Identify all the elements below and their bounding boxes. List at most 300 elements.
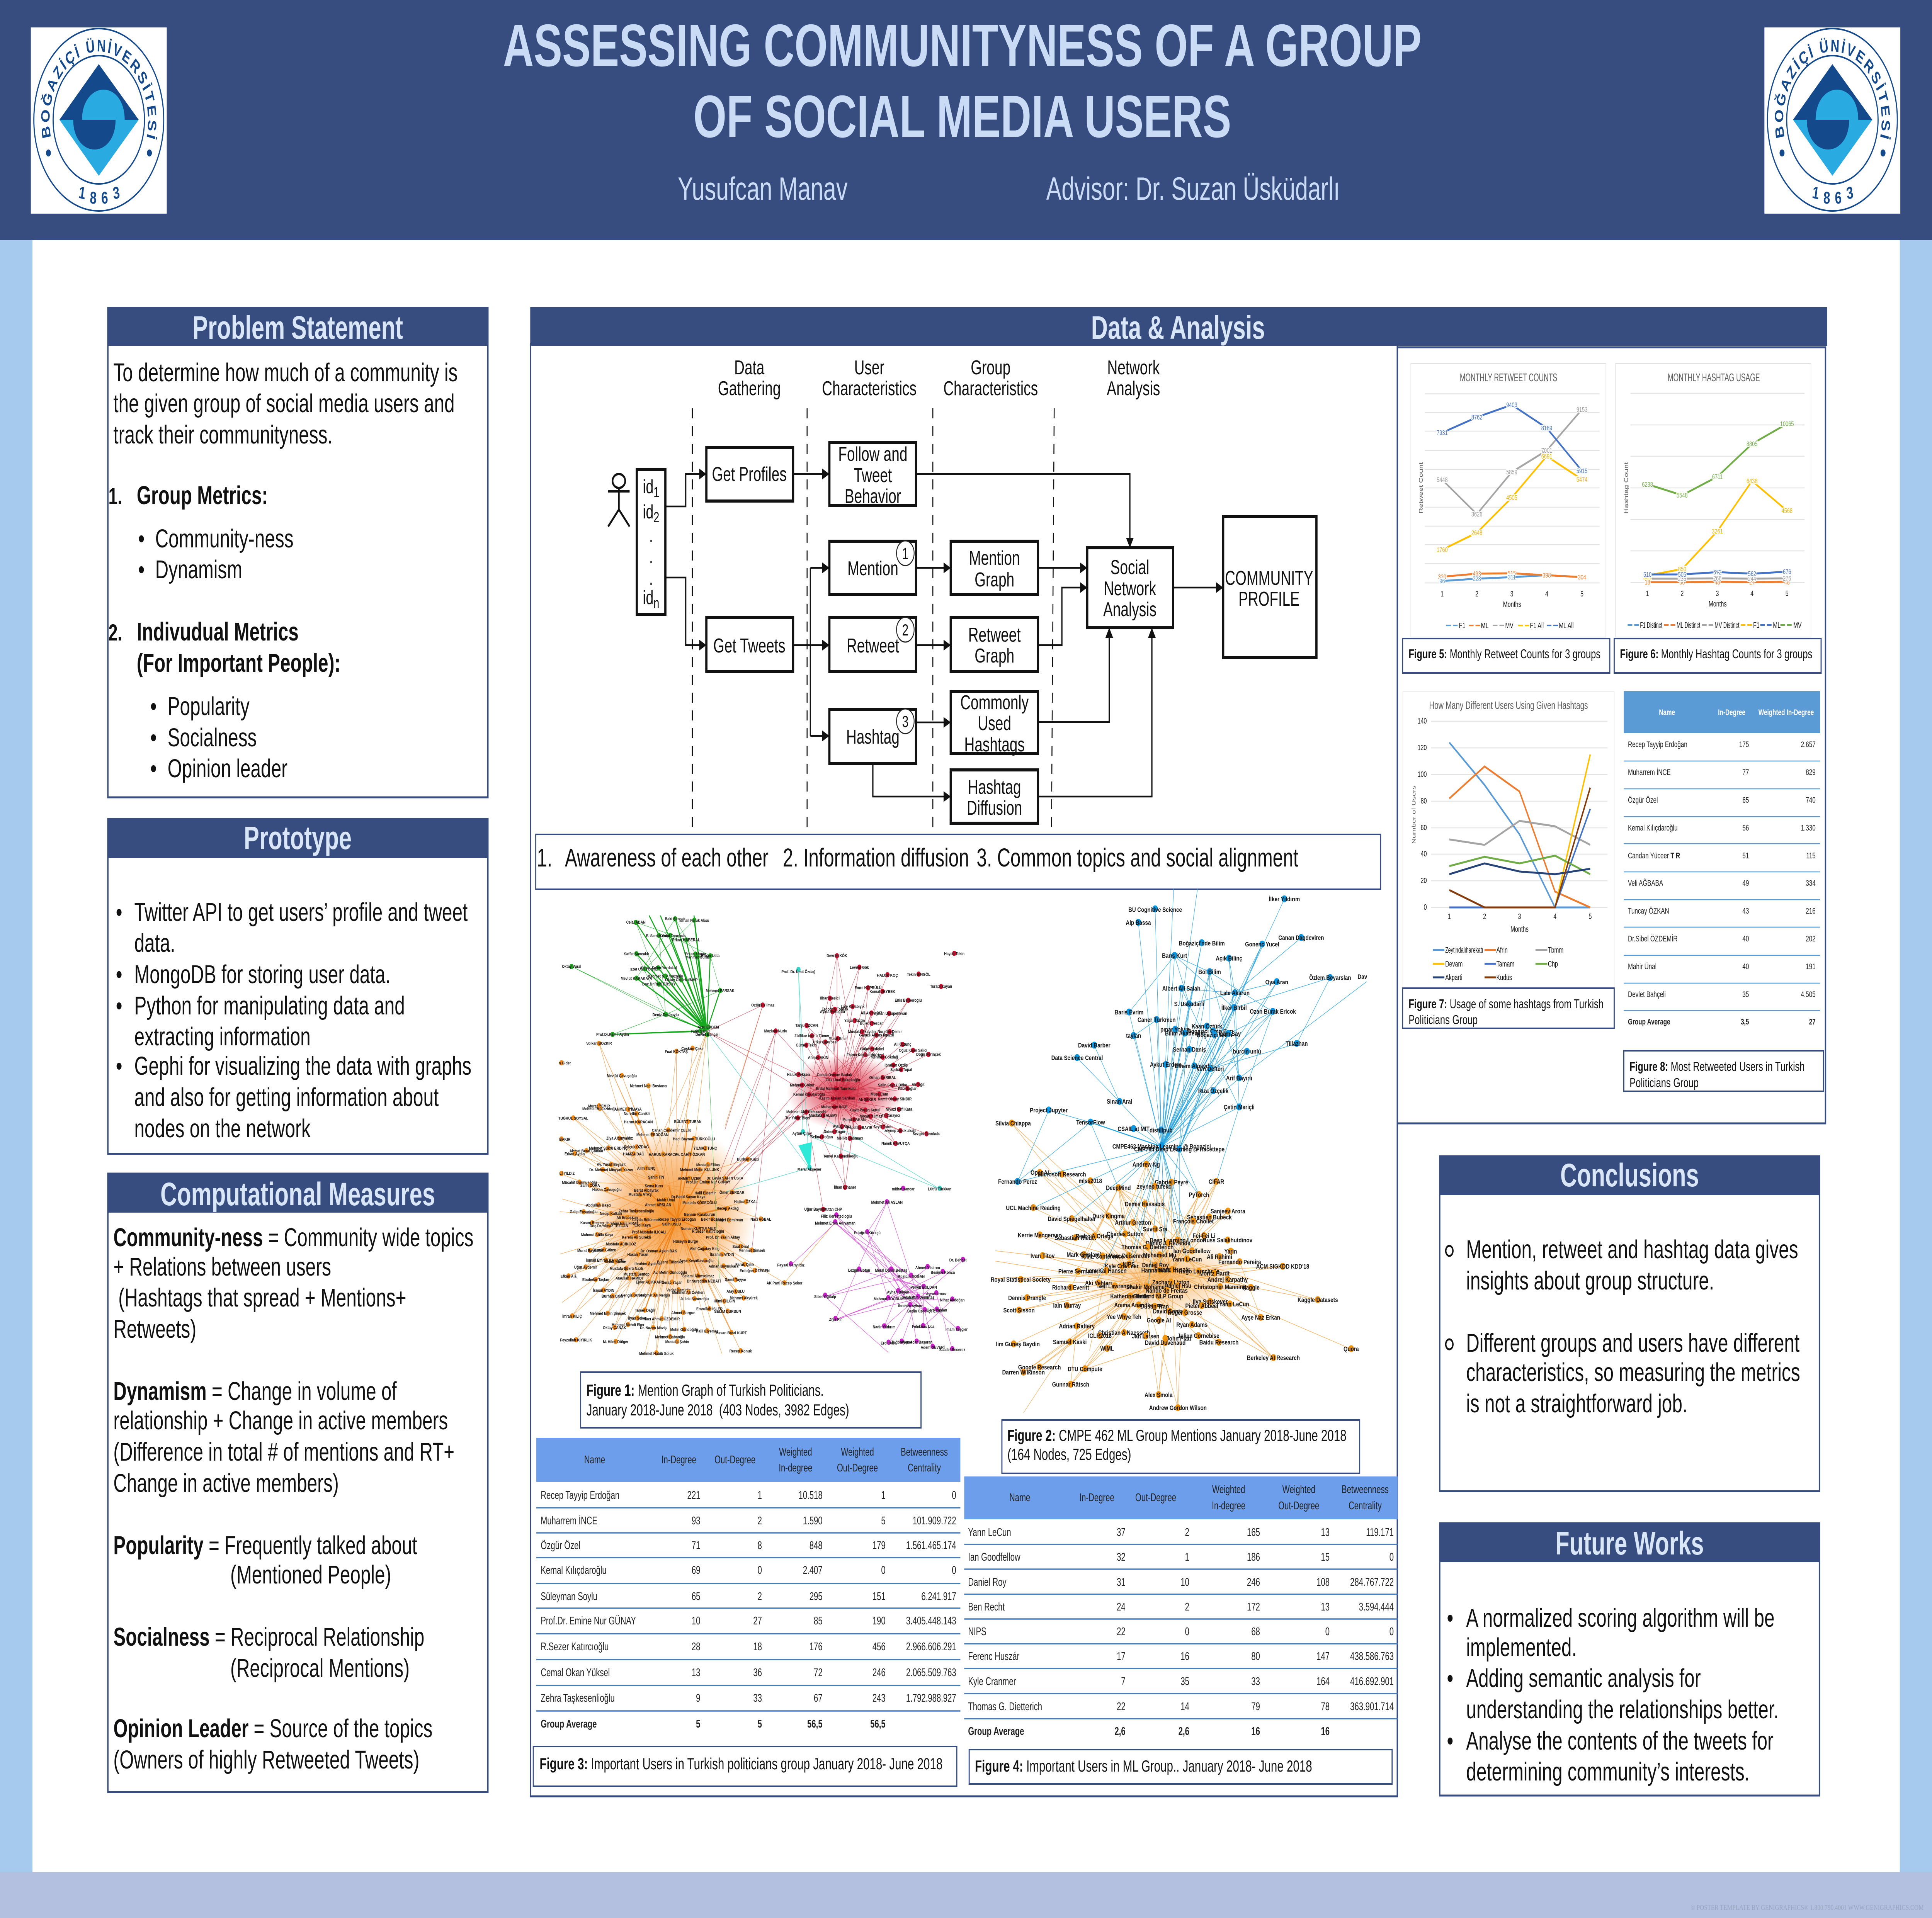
orange nodes: Kerem Ali Sürekli — [622, 1235, 651, 1240]
blue nodes: Rıza Özçelik — [1198, 1087, 1229, 1095]
red nodes: Filiz Sağlar — [898, 1087, 917, 1091]
table: figure 4: 119.171 — [1366, 1527, 1394, 1539]
caption: figure 3 — [533, 1746, 957, 1786]
magenta nodes: Dr. Behçet — [949, 1258, 967, 1263]
table: figure 4: 246 — [1247, 1577, 1260, 1588]
table: figure 8: 216 — [1806, 906, 1816, 916]
orange nodes: Stanford NLP Group — [1133, 1293, 1183, 1300]
green nodes: Ahmet Selim Yurdakul — [640, 966, 677, 970]
red nodes: Aykut Erdoğdu — [820, 1010, 845, 1014]
table: figure 3: 65 — [692, 1591, 700, 1603]
flow boxes: Commonly — [960, 691, 1029, 714]
table: figure 3: Betweenness — [901, 1446, 948, 1458]
orange nodes: Marc Deisenroth — [1109, 1252, 1149, 1260]
orange nodes: Ataullah HAMİDİ — [616, 1276, 643, 1281]
chart: monthly hashtag usage: 2 — [1680, 589, 1684, 598]
text block: conclusions: Mention, retweet and hashtag data gives — [1466, 1235, 1798, 1264]
orange nodes: Mehmet ERDOĞAN — [636, 1132, 668, 1137]
table: figure 4: 2 — [1185, 1527, 1189, 1539]
text block: problem: the given group of social media users and — [113, 389, 455, 418]
callout: community properties: 3. Common topics and social alignment — [976, 843, 1298, 872]
orange nodes: Mohamed Mu — [1143, 1252, 1176, 1259]
flow boxes: 3 — [902, 712, 908, 731]
flow diagram: Data — [734, 356, 765, 379]
table: figure 4: 31 — [1117, 1577, 1126, 1588]
red nodes: Mazlum Nurlu — [764, 1029, 787, 1034]
id list: 1 — [653, 484, 659, 500]
heading: problem statement: Problem Statement — [192, 310, 403, 346]
chart: monthly retweet counts: F1 — [1459, 621, 1465, 630]
panel: prototype — [107, 818, 488, 1154]
footer band: © POSTER TEMPLATE BY GENIGRAPHICS® 1.800.790.4001 WWW.GENIGRAPHICS.COM — [1690, 1903, 1924, 1912]
orange nodes: Zehra Taşkesenlioğlu — [619, 1209, 654, 1214]
orange nodes: Recep Akdağ — [717, 1206, 739, 1211]
chart: monthly retweet counts: 5 — [1580, 590, 1583, 598]
orange nodes: Alim TUNÇ — [637, 1166, 656, 1171]
id list: . — [649, 525, 653, 547]
chart: monthly retweet counts: 493 — [1473, 570, 1481, 578]
chart: monthly hashtag usage: 5 — [1786, 589, 1789, 598]
red nodes: HALUK KOÇ — [877, 973, 898, 978]
orange nodes: Mehmet Ali Cevheri — [672, 1290, 705, 1295]
orange nodes: Halil Etyemez — [696, 1329, 718, 1334]
orange nodes: Ivan Titov — [1031, 1252, 1055, 1260]
orange nodes: Mustafa Elitaş — [696, 1163, 720, 1167]
orange nodes: Ayşe Naz Erkan — [1242, 1314, 1280, 1322]
table: figure 3: Kemal Kılıçdaroğlu — [541, 1565, 607, 1577]
orange nodes: Hatice ÖZKAL — [734, 1199, 758, 1204]
text block: problem: • — [138, 555, 145, 584]
blue nodes: Tillazhan — [1286, 1040, 1308, 1048]
caption: figure 8: Figure 8: Most Retweeted Users in Turkish — [1629, 1060, 1805, 1074]
orange nodes: Erdoğan ÖZEGEN — [740, 1268, 770, 1273]
chart: monthly hashtag usage: 266 — [1713, 575, 1721, 583]
text block: problem: • — [150, 754, 157, 783]
chart: monthly hashtag usage: 6438 — [1747, 477, 1758, 485]
blue nodes: Bol Bilim — [1198, 968, 1221, 976]
red nodes: Haluk Pekşen — [787, 1072, 810, 1077]
chart: hashtag users: Akparti — [1445, 973, 1463, 982]
text block: problem: Dynamism — [155, 555, 242, 584]
orange nodes: R.Sezer Katırcıoğlu — [692, 1229, 724, 1234]
table: figure 3: 27 — [753, 1615, 762, 1627]
table: figure 8: 4.505 — [1801, 989, 1816, 999]
table: figure 4: Ferenc Huszár — [968, 1651, 1019, 1663]
orange nodes: Erkan Aydın — [565, 1152, 585, 1157]
blue nodes: Canan Dagdeviren — [1278, 934, 1324, 941]
orange nodes: Moritz Hardt — [1199, 1270, 1230, 1277]
orange nodes: Harun KARACAN — [624, 1120, 653, 1125]
table: figure 4: 80 — [1251, 1651, 1260, 1663]
table: figure 3: 2 — [758, 1591, 762, 1603]
blue nodes: Ozan Burak Ericok — [1250, 1008, 1296, 1016]
orange nodes: Pierre Sermanet — [1058, 1268, 1098, 1275]
text block: future works — [1447, 1604, 1779, 1786]
orange nodes: Microsoft Research — [1038, 1171, 1086, 1178]
id list: 2 — [653, 509, 659, 525]
orange nodes: Yarin — [1225, 1248, 1237, 1255]
orange nodes: Ian Goodfellow — [1173, 1248, 1211, 1255]
orange nodes: lim Güneş Baydin — [996, 1341, 1040, 1348]
magenta nodes: Faysal Sarıyıldız — [777, 1263, 804, 1268]
blue nodes: burcin unlu — [1233, 1048, 1261, 1055]
red nodes: Didem Engin — [824, 1130, 845, 1134]
orange nodes: Galip Ensarioğlu — [570, 1210, 598, 1215]
text block: problem: Socialness — [168, 723, 257, 752]
chart: hashtag users: 140 — [1418, 717, 1427, 725]
chart: monthly retweet counts: MONTHLY RETWEET COUNTS — [1460, 372, 1557, 384]
chart: hashtag users: 4 — [1553, 912, 1557, 921]
table: figure 3: 85 — [814, 1615, 823, 1627]
table: figure 3: 5 — [758, 1718, 762, 1730]
table: figure 3: 6.241.917 — [921, 1591, 956, 1603]
orange nodes: Pieter Abbeel — [1185, 1303, 1218, 1310]
chart: monthly retweet counts: 3 — [1510, 590, 1514, 598]
blue nodes: Ethem Alpaydın — [1175, 1063, 1214, 1070]
orange nodes: Google AI — [1147, 1317, 1171, 1324]
magenta nodes: Ayşe Acar Başaran — [901, 1340, 932, 1345]
table: figure 8: 202 — [1806, 934, 1816, 943]
orange nodes: Lars Kai Hansen — [1086, 1267, 1127, 1274]
table: figure 8: Muharrem İNCE — [1628, 767, 1671, 777]
chart: hashtag users: 120 — [1418, 743, 1427, 752]
orange nodes: HARUN KARACA — [649, 1152, 678, 1157]
table: figure 3: Weighted — [841, 1446, 874, 1458]
table: figure 3: 33 — [753, 1692, 762, 1704]
orange nodes: Faruk Çelik — [735, 1262, 754, 1267]
orange nodes: AK Parti Recep Şeker — [767, 1281, 802, 1286]
table: figure 8: 2.657 — [1801, 739, 1816, 749]
table: figure 3: 848 — [810, 1540, 823, 1552]
blue nodes: Veri Defteri — [1197, 1065, 1224, 1073]
table: figure 3: 246 — [872, 1667, 886, 1679]
table: figure 3: Prof.Dr. Emine Nur GÜNAY — [541, 1615, 636, 1627]
chart: monthly hashtag usage: 4568 — [1781, 507, 1793, 515]
chart: monthly retweet counts: 1760 — [1437, 546, 1448, 554]
table: figure 8: Özgür Özel — [1628, 795, 1658, 805]
table: figure 4: Name — [1009, 1492, 1030, 1504]
blue nodes — [998, 895, 1367, 1186]
table: figure 4: 363.901.714 — [1350, 1701, 1394, 1713]
text block: prototype tools: MongoDB for storing user data. — [134, 960, 390, 989]
green nodes: Mehmet PARSAK — [706, 989, 735, 993]
text block: problem: • — [150, 692, 157, 721]
caption: figure 7: Figure 7: Usage of some hashtags from Turkish — [1408, 997, 1604, 1011]
id list: id — [643, 476, 653, 498]
blue nodes: Özlem Beyarslan — [1309, 974, 1351, 982]
table: figure 8: Candan Yüceer T R — [1628, 851, 1680, 860]
red nodes: Temel Karamollaoğlu — [823, 1154, 859, 1159]
orange nodes: John Platt — [1166, 1335, 1191, 1342]
orange nodes: Mehmet Mehdi Eker — [612, 1323, 645, 1328]
green nodes: Celal ADAN — [626, 920, 646, 925]
red nodes: Devrim KÖK — [827, 953, 847, 958]
orange nodes: David Duvenaud — [1145, 1339, 1185, 1347]
chart: monthly hashtag usage: 4 — [1750, 589, 1753, 598]
flow diagram: User — [854, 356, 884, 379]
orange nodes: Selçuk ÖZDAĞ — [624, 1144, 649, 1150]
table: figure 4: 16 — [1321, 1726, 1330, 1738]
flow boxes: 2 — [902, 621, 908, 639]
orange nodes: Ferenc Huszár — [1155, 1266, 1190, 1274]
footer band — [0, 1872, 1932, 1918]
table: figure 3: In-Degree — [662, 1454, 696, 1466]
table: figure 3: Recep Tayyip Erdoğan — [541, 1490, 619, 1502]
table: figure 4: 186 — [1247, 1551, 1260, 1563]
orange nodes: Jülide Sarıeroğlu — [680, 1297, 709, 1302]
red nodes: Aytuğ Atıcı — [833, 1125, 851, 1129]
orange nodes: Roger Grosse — [1168, 1309, 1202, 1317]
blue nodes: Data Science Central — [1051, 1055, 1103, 1062]
red nodes: Sezgin Tanrıkulu — [913, 1132, 940, 1137]
red nodes: Erdoğan Toprak — [821, 1007, 849, 1012]
table: figure 4: 165 — [1247, 1527, 1260, 1539]
text block: prototype tools — [116, 898, 471, 1143]
table: figure 4: Kyle Cranmer — [968, 1676, 1016, 1688]
red nodes: Orhan SARIBAL — [869, 1075, 896, 1080]
table: figure 3: 0 — [952, 1490, 956, 1502]
table: figure 4: Weighted — [1282, 1484, 1315, 1496]
orange nodes: Bülent Tüfenkci — [657, 1260, 683, 1265]
logo right: 1 — [1811, 183, 1820, 203]
magenta nodes: Mahmut TOĞRUL — [874, 1296, 903, 1302]
chart: monthly retweet counts: 2 — [1475, 590, 1478, 598]
text block: future works: A normalized scoring algorithm will be — [1466, 1604, 1774, 1633]
orange nodes: Hanna Wallach — [1141, 1267, 1178, 1274]
red nodes: zeynep altıok akatlı — [884, 1129, 917, 1133]
orange nodes: Aki Vehtari — [1085, 1280, 1112, 1287]
table: figure 4: 68 — [1251, 1626, 1260, 1638]
table: figure 8: 49 — [1742, 878, 1749, 888]
flow boxes: Mention — [969, 547, 1020, 569]
caption: figure 1 — [581, 1372, 921, 1428]
orange nodes: Mustafa Şahin — [665, 1340, 689, 1344]
orange nodes: Andrej Karpathy — [1208, 1276, 1248, 1283]
orange nodes: Mustafa Şentop — [623, 1272, 650, 1277]
magenta nodes: Ziya Pir — [829, 1317, 842, 1322]
text block: conclusions: is not a straightforward job. — [1466, 1389, 1687, 1418]
table: figure 3: Out-Degree — [837, 1462, 878, 1474]
orange nodes: Gabriel Peyré — [1155, 1179, 1188, 1186]
text block: measures: Socialness = Reciprocal Relationship — [113, 1622, 424, 1651]
table: figure 3: 295 — [810, 1591, 823, 1603]
orange nodes: Daniel Hsu — [1165, 1283, 1191, 1289]
orange nodes: Bekir Bozdağ — [701, 1217, 723, 1222]
orange nodes: Hasan Turan — [628, 1252, 648, 1257]
orange nodes — [991, 1120, 1359, 1412]
title: ASSESSING COMMUNITYNESS OF A GROUP — [503, 12, 1422, 79]
orange nodes: İsmail AYDIN — [593, 1288, 614, 1293]
orange nodes: Burhan Çakır — [602, 1294, 624, 1299]
blue nodes: Caner Türkmen — [1138, 1016, 1175, 1024]
table: figure 3: 1.561.465.174 — [906, 1540, 956, 1552]
blue nodes: Arif Bayırlı — [1226, 1075, 1252, 1082]
red nodes — [751, 951, 964, 1212]
table: figure 8: Dr.Sibel ÖZDEMİR — [1628, 934, 1677, 943]
table: figure 3: 9 — [696, 1692, 700, 1704]
orange nodes: M. Hilmi Dülger — [603, 1340, 628, 1344]
table: figure 8: 175 — [1739, 739, 1749, 749]
red nodes: Kemal ZEYBEK — [869, 990, 896, 994]
orange nodes: Feyzullah KIYIKLIK — [560, 1338, 592, 1343]
table: figure 8 — [1624, 691, 1820, 1026]
right side strip — [1900, 240, 1932, 1872]
chart: monthly retweet counts: 5448 — [1437, 476, 1448, 484]
text block: prototype tools: • — [116, 898, 122, 927]
table: figure 3: 2 — [758, 1515, 762, 1527]
orange nodes: Vedat Demiröz — [667, 1288, 690, 1293]
orange nodes: Tamer Dağlı — [635, 1308, 655, 1313]
flow boxes: 1 — [902, 544, 908, 562]
table: figure 4: Daniel Roy — [968, 1577, 1007, 1588]
table: figure 3: 10.518 — [799, 1490, 823, 1502]
chart: hashtag users: 3 — [1518, 912, 1521, 921]
text block: measures: + Relations between users — [113, 1252, 331, 1281]
chart: monthly retweet counts: 5859 — [1506, 469, 1517, 476]
logo right: 6 — [1835, 188, 1842, 208]
blue nodes: CSAIL at MIT — [1117, 1126, 1150, 1133]
chart: monthly hashtag usage — [1616, 364, 1811, 637]
caption: figure 8 — [1624, 1051, 1823, 1091]
chart: hashtag users — [1403, 692, 1614, 988]
table: figure 3: 18 — [753, 1641, 762, 1653]
orange nodes: Bennur Karaburun — [684, 1213, 715, 1217]
orange nodes: Selami Altınsolmaz — [682, 1274, 714, 1279]
chart: monthly retweet counts: 96 — [1439, 578, 1445, 585]
table: figure 3: 93 — [692, 1515, 700, 1527]
orange nodes: Kaggle — [1242, 1284, 1260, 1291]
orange nodes: Serap Yaşar — [662, 1281, 682, 1285]
orange nodes: DeepMind — [1106, 1184, 1131, 1192]
logo left: 8 — [90, 188, 97, 208]
orange nodes: Mehmet Metin KULUNK — [680, 1168, 719, 1172]
text block: conclusions — [1446, 1235, 1800, 1418]
blue nodes: S. Uskudarli — [1174, 1001, 1204, 1008]
table: figure 4: Out-Degree — [1135, 1492, 1176, 1504]
orange nodes: Ömer SERDAR — [719, 1189, 745, 1195]
orange nodes: Ali Ercoşkun — [616, 1216, 638, 1220]
orange nodes: Dr. Mehmet Muş — [589, 1168, 616, 1173]
table: figure 8: Name — [1659, 707, 1675, 717]
chart: hashtag users: 100 — [1418, 770, 1427, 779]
orange nodes: Av. Yusuf Beyazıt — [597, 1162, 626, 1167]
table: figure 4: 0 — [1389, 1626, 1394, 1638]
caption: figure 7 — [1403, 988, 1614, 1028]
chart: monthly retweet counts: 8762 — [1471, 414, 1482, 421]
green nodes: E. Semih Yalçın — [646, 934, 672, 938]
red nodes: Mehmet Gökdağ — [871, 1055, 898, 1060]
table: figure 3: Zehra Taşkesenlioğlu — [541, 1692, 615, 1704]
orange nodes: TUĞRUL SOYSAL — [558, 1115, 588, 1121]
table: figure 8: Group Average — [1628, 1017, 1670, 1026]
red nodes: Lale Karabıyık — [841, 1004, 865, 1009]
table: figure 8: Mahir Ünal — [1628, 962, 1656, 971]
id list: id — [643, 501, 653, 523]
text block: problem: Popularity — [168, 692, 250, 721]
chart: monthly hashtag usage: F1 Distinct — [1640, 621, 1662, 630]
red nodes: Cavit Puran Sertel — [850, 1108, 881, 1113]
chart: monthly retweet counts: 320 — [1438, 573, 1446, 581]
id list: . — [649, 568, 653, 590]
blue nodes: Oya Aran — [1265, 979, 1288, 986]
red nodes: Emre KÖPRÜLÜ — [855, 985, 882, 990]
orange nodes: Erol Kaya — [634, 1223, 651, 1228]
red nodes: Namık HAVUTÇA — [881, 1142, 910, 1146]
table: figure 4: Betweenness — [1342, 1484, 1389, 1496]
chart: hashtag users: Kudüs — [1497, 973, 1512, 982]
text block: measures — [113, 1223, 473, 1774]
magenta nodes: Nihat Akdoğan — [940, 1298, 964, 1303]
blue nodes: Baris Evrim — [1115, 1009, 1143, 1016]
magenta nodes: Garo Paylan — [927, 1308, 947, 1313]
blue nodes: Dav — [1358, 973, 1367, 980]
green nodes: Doç.Dr.Ruhi ERSOY — [642, 982, 676, 987]
table: figure 8: Tuncay ÖZKAN — [1628, 906, 1669, 916]
flow boxes: COMMUNITY — [1225, 567, 1313, 590]
orange nodes: Pedro A Ortega — [1076, 1233, 1114, 1240]
text block: measures: relationship + Change in active members — [113, 1406, 448, 1435]
magenta nodes: Müslüm DOĞAN — [898, 1274, 925, 1279]
blue nodes: Lale Akarun — [1220, 990, 1250, 997]
panel: conclusions — [1439, 1155, 1820, 1491]
table: figure 4: 13 — [1321, 1601, 1330, 1613]
green nodes: Oktay Vural — [562, 965, 581, 969]
table: figure 3: 456 — [872, 1641, 886, 1653]
red nodes: Selina Doğan — [811, 1135, 833, 1140]
table: figure 8: Weighted In-Degree — [1759, 707, 1814, 717]
chart: monthly retweet counts: Retweet Count — [1418, 462, 1424, 513]
green nodes: Erkan Akçay — [685, 952, 706, 957]
green nodes: Erkan HABERAL — [672, 938, 700, 943]
table: figure 8: Recep Tayyip Erdoğan — [1628, 739, 1687, 749]
chart: monthly hashtag usage: 3261 — [1712, 528, 1723, 535]
chart: monthly retweet counts: MV — [1505, 621, 1514, 630]
table: figure 3: 56,5 — [870, 1718, 886, 1730]
red nodes: Cemal Osman Budak — [817, 1073, 852, 1077]
table: figure 4: 16 — [1251, 1726, 1260, 1738]
orange nodes: Volkan BOZKIR — [586, 1041, 612, 1046]
chart: hashtag users: 80 — [1421, 797, 1427, 805]
green nodes: İsmail Faruk Aksu — [679, 918, 709, 923]
table: figure 4: 14 — [1180, 1701, 1189, 1713]
red nodes: Ayhan Uslupehlivan — [874, 1011, 907, 1016]
green nodes: Saffet Sancaklı — [624, 952, 649, 957]
table: figure 3: 2.966.606.291 — [906, 1641, 956, 1653]
logo left: 3 — [112, 183, 121, 203]
chart: monthly hashtag usage: 18 — [1645, 579, 1650, 586]
flow boxes: Graph — [975, 644, 1014, 667]
text block: problem: track their communityness. — [113, 420, 333, 449]
orange nodes: Daniel Roy — [1142, 1262, 1169, 1269]
id list: . — [649, 546, 653, 568]
arrows — [665, 469, 1223, 802]
orange nodes: Dr. Nazım Maviş — [640, 1326, 667, 1331]
orange nodes: Ayşe Keşir — [679, 1259, 697, 1263]
table: figure 4: 438.586.763 — [1350, 1651, 1394, 1663]
orange nodes: Mehmet Emin Şimşek — [590, 1312, 626, 1316]
red nodes: Turabi Kayan — [930, 984, 952, 989]
flow boxes: Used — [978, 712, 1011, 735]
red nodes: Kemal Kılıçdaroğlu — [793, 1092, 825, 1097]
table: figure 4: 13 — [1321, 1527, 1330, 1539]
chart: monthly retweet counts: ML All — [1559, 621, 1574, 630]
orange nodes: Fernando Pereira — [1218, 1259, 1261, 1266]
table: figure 8: 35 — [1742, 989, 1749, 999]
table: figure 8: 43 — [1742, 906, 1749, 916]
author: Yusufcan Manav — [678, 171, 848, 207]
flow boxes: Network — [1104, 577, 1156, 600]
orange nodes: Cemil Yaman — [604, 1260, 626, 1264]
